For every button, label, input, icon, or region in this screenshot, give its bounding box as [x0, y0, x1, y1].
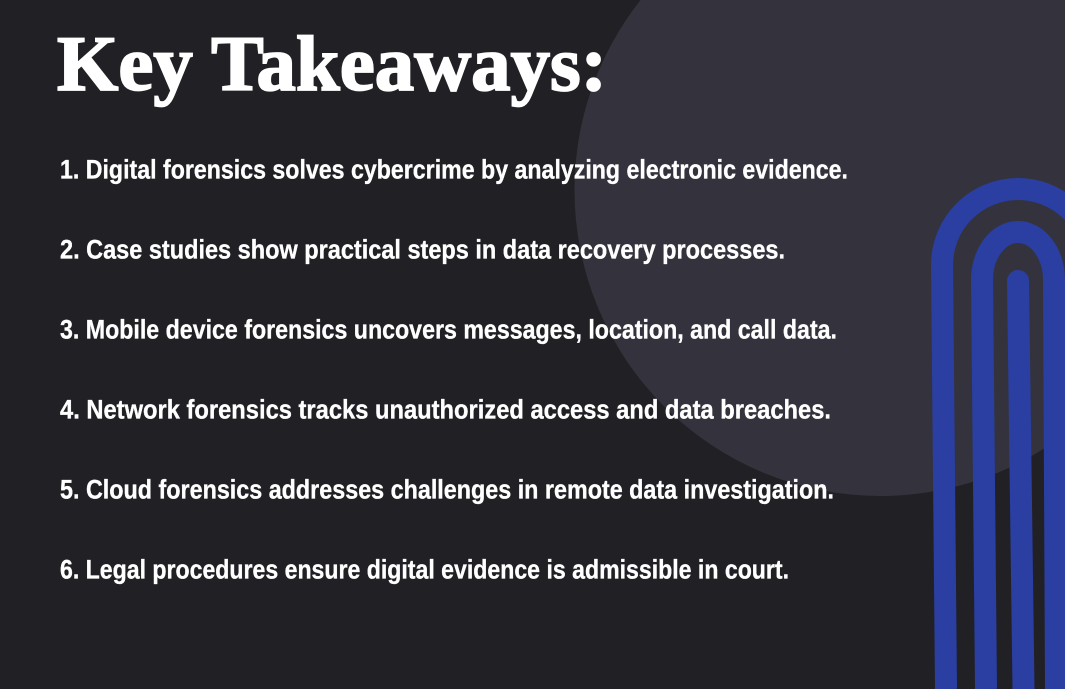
takeaway 6: 6. Legal procedures ensure digital evidence is admissible in court. — [60, 554, 789, 584]
takeaway 4: 4. Network forensics tracks unauthorized access and data breaches. — [60, 394, 831, 424]
decorative blue arches — [942, 189, 1065, 689]
background circle — [574, 0, 1065, 496]
takeaway 2: 2. Case studies show practical steps in data recovery processes. — [60, 234, 785, 264]
takeaway 5: 5. Cloud forensics addresses challenges in remote data investigation. — [60, 474, 834, 504]
takeaway 3: 3. Mobile device forensics uncovers messages, location, and call data. — [60, 314, 837, 344]
title: Key Takeaways: — [57, 20, 607, 107]
takeaway 1: 1. Digital forensics solves cybercrime by analyzing electronic evidence. — [60, 154, 848, 184]
